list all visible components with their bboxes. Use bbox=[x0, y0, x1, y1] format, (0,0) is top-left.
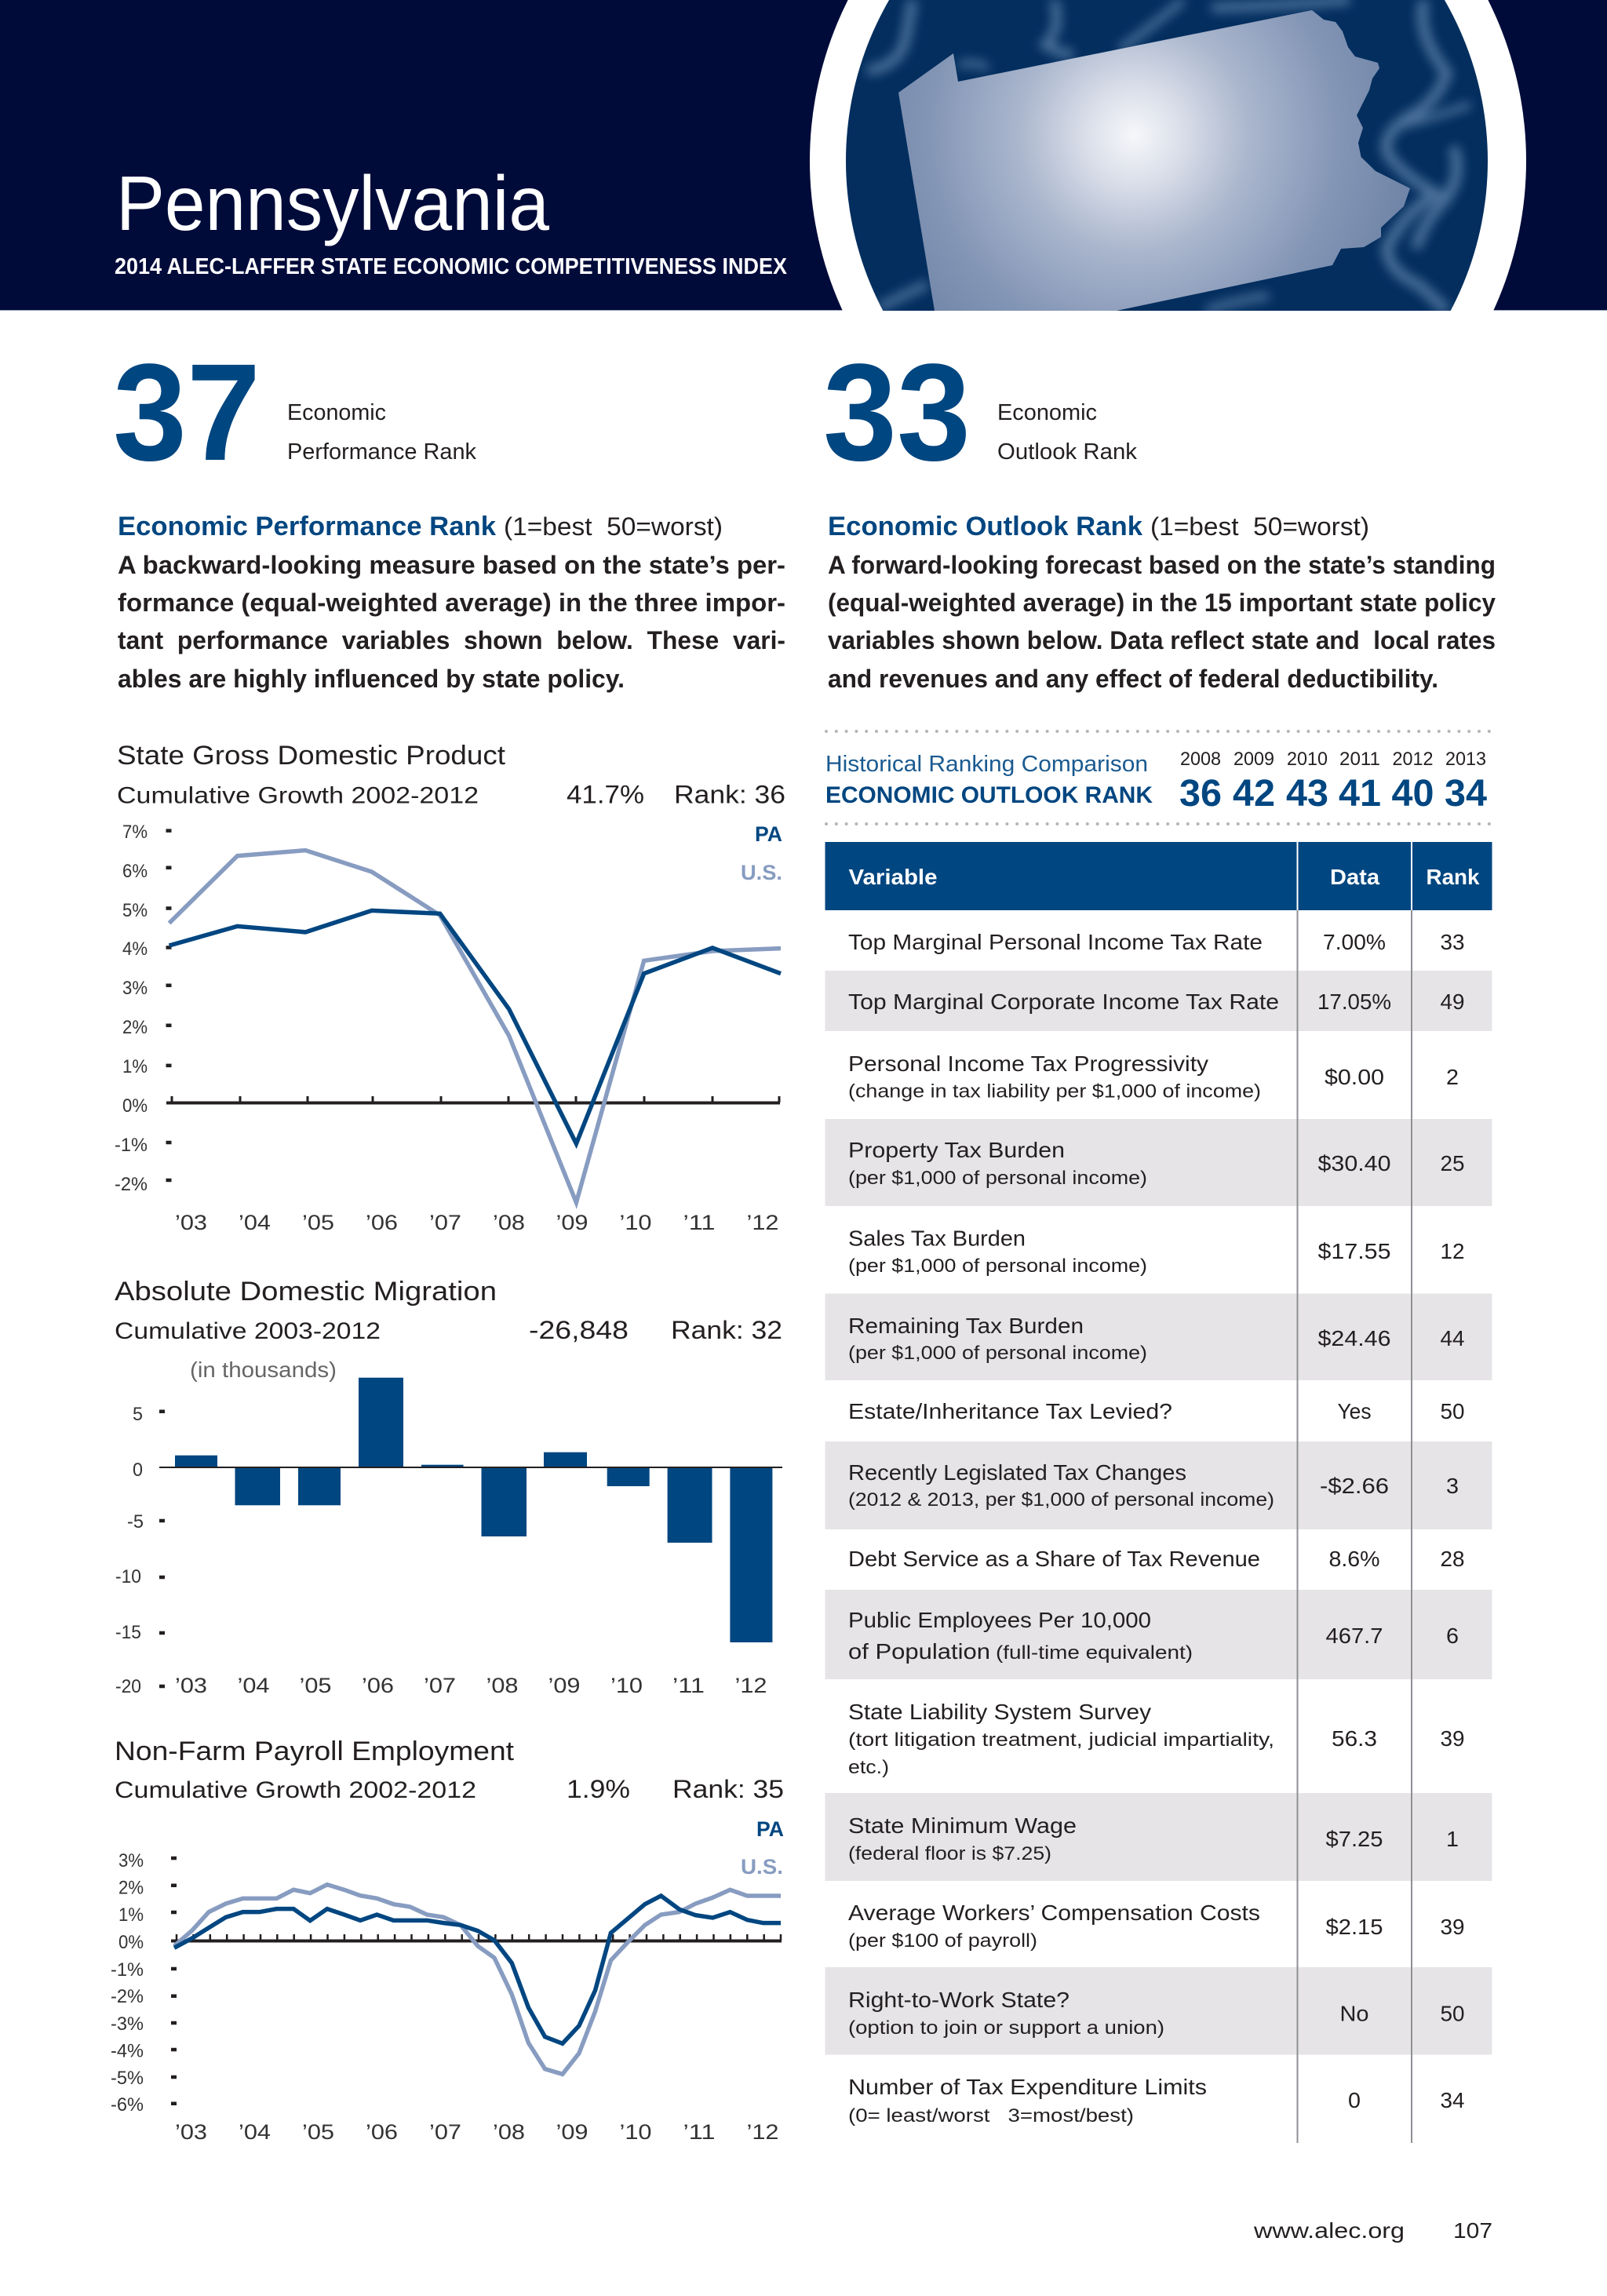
legend: PA bbox=[756, 1817, 784, 1841]
x axis labels: ’09 bbox=[556, 1211, 589, 1234]
panel: historical ranking comparison bbox=[825, 749, 1487, 815]
row: personal income tax progressivity: (change in tax liability per $1,000 of income) bbox=[848, 1081, 1261, 1102]
x axis labels: ’03 bbox=[175, 1211, 207, 1234]
row: remaining tax burden: 44 bbox=[1441, 1326, 1464, 1350]
row: remaining tax burden: Remaining Tax Burden bbox=[848, 1314, 1084, 1338]
chart heading: GDP: 41.7% bbox=[567, 780, 644, 808]
chart heading: employment: Rank: 35 bbox=[672, 1775, 784, 1803]
row: sales tax burden: $17.55 bbox=[1318, 1239, 1390, 1263]
y axis labels: -15 bbox=[115, 1622, 141, 1643]
row: top marginal corporate income tax rate: Top Marginal Corporate Income Tax Rate bbox=[848, 989, 1279, 1014]
line: PA bbox=[169, 910, 781, 1144]
panel: historical ranking comparison: ECONOMIC OUTLOOK RANK bbox=[825, 782, 1153, 808]
row: state minimum wage: State Minimum Wage bbox=[848, 1813, 1077, 1838]
header banner bbox=[0, 0, 1607, 311]
y axis labels: 5% bbox=[122, 900, 148, 921]
row: right-to-work state bbox=[848, 1988, 1464, 2039]
x axis labels bbox=[175, 2120, 778, 2144]
x axis labels: ’04 bbox=[237, 1674, 270, 1697]
y axis labels bbox=[115, 822, 148, 1195]
table header bbox=[825, 842, 1492, 910]
row: public employees: (full-time equivalent) bbox=[996, 1642, 1193, 1664]
text block: economic performance rank description: A backward-looking measure based on the state’s per- bbox=[118, 551, 785, 579]
outlook rank number: Outlook Rank bbox=[997, 439, 1138, 465]
years: 2008 bbox=[1180, 749, 1221, 770]
footer: www.alec.org bbox=[1253, 2218, 1405, 2243]
y axis labels: 0 bbox=[133, 1460, 143, 1481]
outlook rank number bbox=[823, 336, 1138, 490]
row: personal income tax progressivity: $0.00 bbox=[1325, 1065, 1384, 1089]
row: number of tax expenditure limits: (0= least/worst 3=most/best) bbox=[848, 2105, 1134, 2127]
chart heading: migration: -26,848 bbox=[529, 1316, 629, 1344]
row: public employees: of Population bbox=[848, 1639, 990, 1664]
x axis labels bbox=[175, 1211, 778, 1234]
text block: economic performance rank description: (1=best 50=worst) bbox=[504, 512, 723, 541]
x axis labels: ’10 bbox=[620, 2120, 651, 2144]
row: recently legislated tax changes: (2012 & 2013, per $1,000 of personal income) bbox=[848, 1489, 1274, 1511]
y axis labels: 4% bbox=[122, 938, 148, 960]
x axis labels: ’06 bbox=[366, 2120, 398, 2144]
row: right-to-work state: No bbox=[1340, 2001, 1368, 2026]
x axis labels: ’08 bbox=[493, 1211, 525, 1234]
performance rank number: Economic bbox=[287, 400, 386, 425]
outlook rank number: 33 bbox=[823, 336, 971, 490]
row: sales tax burden: (per $1,000 of personal income) bbox=[848, 1256, 1147, 1277]
row: state liability system survey: 56.3 bbox=[1332, 1726, 1377, 1751]
row: right-to-work state: 50 bbox=[1441, 2001, 1464, 2026]
row: property tax burden: (per $1,000 of personal income) bbox=[848, 1168, 1147, 1189]
y axis labels: -4% bbox=[111, 2041, 144, 2062]
chart: non-farm payroll employment bbox=[111, 1737, 784, 2144]
x axis labels: ’06 bbox=[362, 1674, 394, 1697]
row: property tax burden: Property Tax Burden bbox=[848, 1138, 1065, 1162]
x axis labels: ’05 bbox=[300, 1674, 331, 1697]
years bbox=[1180, 749, 1486, 770]
row: number of tax expenditure limits: 0 bbox=[1348, 2088, 1361, 2112]
row: property tax burden bbox=[848, 1138, 1464, 1189]
text block: economic outlook rank description bbox=[828, 512, 1496, 693]
ranks by year bbox=[1179, 773, 1487, 815]
table header: Data bbox=[1330, 865, 1379, 889]
text block: economic performance rank description: ables are highly influenced by state policy. bbox=[118, 665, 625, 693]
y axis labels: -1% bbox=[115, 1135, 148, 1156]
chart: absolute domestic migration bbox=[115, 1277, 782, 1697]
row: property tax burden: $30.40 bbox=[1318, 1151, 1390, 1175]
y axis labels: 1% bbox=[118, 1904, 144, 1926]
row: state liability system survey: 39 bbox=[1441, 1726, 1464, 1751]
x axis labels: ’07 bbox=[424, 1674, 456, 1697]
row: personal income tax progressivity bbox=[848, 1051, 1459, 1102]
x axis labels: ’08 bbox=[493, 2120, 525, 2144]
legend: PA bbox=[755, 822, 782, 846]
subtitle: 2014 ALEC-LAFFER STATE ECONOMIC COMPETITIVENESS INDEX bbox=[115, 254, 788, 279]
years: 2012 bbox=[1392, 749, 1433, 770]
row: state liability system survey bbox=[848, 1700, 1464, 1778]
legend bbox=[741, 1817, 784, 1879]
legend: U.S. bbox=[741, 1855, 783, 1879]
performance rank number: Performance Rank bbox=[287, 439, 476, 465]
row: state liability system survey: (tort litigation treatment, judicial impartiality, bbox=[848, 1729, 1274, 1751]
row: sales tax burden: 12 bbox=[1441, 1239, 1464, 1263]
row: sales tax burden bbox=[848, 1226, 1464, 1277]
chart heading: migration: (in thousands) bbox=[190, 1358, 337, 1382]
y axis labels: -3% bbox=[111, 2014, 144, 2035]
footer bbox=[1253, 2218, 1492, 2243]
row: number of tax expenditure limits bbox=[848, 2075, 1464, 2127]
x axis labels: ’08 bbox=[486, 1674, 518, 1697]
x axis labels: ’10 bbox=[620, 1211, 651, 1234]
row: debt service: Debt Service as a Share of Tax Revenue bbox=[848, 1547, 1260, 1571]
row: remaining tax burden: (per $1,000 of personal income) bbox=[848, 1343, 1147, 1364]
y axis labels: -10 bbox=[115, 1566, 141, 1587]
y axis labels: 2% bbox=[122, 1017, 148, 1038]
row: top marginal corporate income tax rate: 49 bbox=[1441, 989, 1464, 1014]
text block: economic performance rank description: formance (equal-weighted average) in the three impor- bbox=[118, 589, 785, 617]
row: top marginal corporate income tax rate: 17.05% bbox=[1317, 989, 1391, 1014]
text block: economic outlook rank description: A forward-looking forecast based on the state’s standing bbox=[828, 551, 1496, 579]
y axis labels: 0% bbox=[122, 1095, 148, 1117]
chart heading: employment: 1.9% bbox=[567, 1775, 630, 1803]
x axis labels: ’07 bbox=[429, 1211, 461, 1234]
y axis labels: -1% bbox=[111, 1959, 144, 1981]
row: number of tax expenditure limits: 34 bbox=[1441, 2088, 1464, 2112]
y axis labels: -5% bbox=[111, 2068, 144, 2089]
x axis labels: ’04 bbox=[239, 2120, 271, 2144]
row: top marginal personal income tax rate bbox=[848, 930, 1464, 954]
row: debt service: 8.6% bbox=[1329, 1547, 1379, 1571]
years: 2011 bbox=[1339, 749, 1380, 770]
ranks by year: 36 bbox=[1179, 773, 1222, 815]
row: debt service bbox=[848, 1547, 1464, 1571]
x axis labels: ’10 bbox=[610, 1674, 643, 1697]
x axis labels: ’09 bbox=[548, 1674, 581, 1697]
y axis labels: 3% bbox=[122, 978, 148, 999]
years: 2009 bbox=[1233, 749, 1274, 770]
y axis labels: -6% bbox=[111, 2094, 144, 2116]
text block: economic outlook rank description: (1=best 50=worst) bbox=[1150, 512, 1369, 541]
performance rank number: 37 bbox=[113, 336, 261, 490]
line: U.S. bbox=[169, 851, 781, 1202]
row: top marginal corporate income tax rate bbox=[848, 989, 1464, 1014]
x axis labels: ’03 bbox=[175, 2120, 207, 2144]
legend: U.S. bbox=[741, 861, 782, 884]
row: remaining tax burden: $24.46 bbox=[1318, 1326, 1390, 1350]
row: public employees: 467.7 bbox=[1326, 1624, 1383, 1648]
chart heading: migration: Rank: 32 bbox=[671, 1316, 782, 1344]
x axis labels: ’06 bbox=[366, 1211, 398, 1234]
row: average workers' compensation costs: Average Workers’ Compensation Costs bbox=[848, 1901, 1260, 1925]
row: state minimum wage bbox=[848, 1813, 1459, 1864]
table: state policy variables bbox=[825, 842, 1492, 2143]
x axis labels: ’11 bbox=[672, 1674, 705, 1697]
row: sales tax burden: Sales Tax Burden bbox=[848, 1226, 1026, 1251]
ranks by year: 41 bbox=[1339, 773, 1381, 815]
y axis labels bbox=[115, 1404, 144, 1697]
x axis labels: ’05 bbox=[302, 2120, 334, 2144]
x axis labels: ’11 bbox=[683, 1211, 716, 1234]
y axis labels: -2% bbox=[111, 1986, 144, 2007]
row: recently legislated tax changes bbox=[848, 1460, 1459, 1511]
chart heading: employment: Cumulative Growth 2002-2012 bbox=[115, 1777, 476, 1803]
row: state minimum wage: 1 bbox=[1446, 1827, 1459, 1851]
x axis labels: ’12 bbox=[747, 1211, 778, 1234]
table header: Rank bbox=[1427, 865, 1480, 889]
x axis labels: ’05 bbox=[302, 1211, 334, 1234]
row: right-to-work state: (option to join or support a union) bbox=[848, 2017, 1164, 2039]
row: property tax burden: 25 bbox=[1441, 1151, 1464, 1175]
x axis labels: ’12 bbox=[734, 1674, 767, 1697]
row: debt service: 28 bbox=[1441, 1547, 1464, 1571]
row: number of tax expenditure limits: Number of Tax Expenditure Limits bbox=[848, 2075, 1207, 2099]
row: remaining tax burden bbox=[848, 1314, 1464, 1364]
row: top marginal personal income tax rate: 7.00% bbox=[1323, 930, 1386, 954]
medallion: Pennsylvania state map bbox=[810, 0, 1526, 311]
y axis labels: 1% bbox=[122, 1056, 148, 1077]
row: state liability system survey: State Liability System Survey bbox=[848, 1700, 1151, 1724]
row: state minimum wage: $7.25 bbox=[1326, 1827, 1383, 1851]
row: top marginal personal income tax rate: Top Marginal Personal Income Tax Rate bbox=[848, 930, 1263, 954]
ranks by year: 43 bbox=[1286, 773, 1328, 815]
text block: economic outlook rank description: (equal-weighted average) in the 15 important state policy bbox=[828, 589, 1496, 617]
years: 2013 bbox=[1445, 749, 1486, 770]
chart heading: GDP: Rank: 36 bbox=[674, 780, 785, 808]
row: state liability system survey: etc.) bbox=[848, 1757, 889, 1778]
text block: economic outlook rank description: and revenues and any effect of federal deductibility. bbox=[828, 665, 1438, 693]
ranks by year: 34 bbox=[1445, 773, 1487, 815]
y axis labels: 7% bbox=[122, 822, 148, 843]
x axis labels: ’07 bbox=[429, 2120, 461, 2144]
text block: economic outlook rank description: variables shown below. Data reflect state and local rates bbox=[828, 626, 1496, 654]
y axis labels: 5 bbox=[133, 1404, 143, 1425]
row: estate/inheritance tax levied bbox=[848, 1399, 1464, 1423]
row: state minimum wage: (federal floor is $7.25) bbox=[848, 1843, 1051, 1864]
row: estate/inheritance tax levied: 50 bbox=[1441, 1399, 1464, 1423]
years: 2010 bbox=[1287, 749, 1328, 770]
x axis labels bbox=[175, 1674, 767, 1697]
row: estate/inheritance tax levied: Estate/Inheritance Tax Levied? bbox=[848, 1399, 1172, 1423]
chart heading: migration: Absolute Domestic Migration bbox=[115, 1277, 497, 1307]
chart heading: migration: Cumulative 2003-2012 bbox=[115, 1318, 381, 1344]
x axis labels: ’04 bbox=[239, 1211, 271, 1234]
panel: historical ranking comparison: Historical Ranking Comparison bbox=[825, 752, 1148, 777]
ranks by year: 42 bbox=[1233, 773, 1275, 815]
chart heading: GDP: Cumulative Growth 2002-2012 bbox=[117, 783, 479, 808]
y axis labels: 3% bbox=[118, 1850, 144, 1871]
text block: economic performance rank description: Economic Performance Rank bbox=[118, 512, 496, 541]
line: U.S. bbox=[174, 1885, 781, 2074]
x axis labels: ’11 bbox=[683, 2120, 716, 2144]
row: estate/inheritance tax levied: Yes bbox=[1337, 1399, 1372, 1423]
row: personal income tax progressivity: Personal Income Tax Progressivity bbox=[848, 1051, 1208, 1076]
row: recently legislated tax changes: 3 bbox=[1446, 1474, 1459, 1498]
row: average workers' compensation costs: (per $100 of payroll) bbox=[848, 1930, 1037, 1952]
y axis labels: 0% bbox=[118, 1932, 144, 1953]
row: personal income tax progressivity: 2 bbox=[1446, 1065, 1459, 1089]
footer: 107 bbox=[1453, 2218, 1492, 2243]
y axis labels bbox=[111, 1850, 144, 2116]
chart heading: migration bbox=[115, 1277, 782, 1382]
text block: economic outlook rank description: Economic Outlook Rank bbox=[828, 512, 1142, 541]
performance rank number bbox=[113, 336, 476, 490]
row: recently legislated tax changes: Recently Legislated Tax Changes bbox=[848, 1460, 1186, 1485]
chart heading: employment: Non-Farm Payroll Employment bbox=[115, 1737, 515, 1766]
text block: economic performance rank description bbox=[118, 512, 785, 693]
y axis labels: -5 bbox=[127, 1511, 144, 1532]
y axis labels: 2% bbox=[118, 1878, 144, 1899]
outlook rank number: Economic bbox=[997, 400, 1097, 425]
y axis labels: -20 bbox=[115, 1676, 141, 1697]
bars bbox=[175, 1378, 772, 1642]
row: top marginal personal income tax rate: 33 bbox=[1441, 930, 1464, 954]
chart heading: GDP bbox=[117, 741, 785, 808]
x axis labels: ’09 bbox=[556, 2120, 589, 2144]
x axis labels: ’03 bbox=[175, 1674, 207, 1697]
y axis labels: -2% bbox=[115, 1174, 148, 1195]
x axis labels: ’12 bbox=[747, 2120, 778, 2144]
row: average workers' compensation costs bbox=[848, 1901, 1464, 1952]
row: public employees: 6 bbox=[1446, 1624, 1459, 1648]
text block: economic performance rank description: tant performance variables shown below. These vari- bbox=[118, 626, 785, 654]
row: right-to-work state: Right-to-Work State? bbox=[848, 1988, 1070, 2012]
row: public employees: Public Employees Per 10,000 bbox=[848, 1608, 1151, 1632]
line: PA bbox=[174, 1896, 781, 2043]
row: average workers' compensation costs: $2.15 bbox=[1326, 1915, 1383, 1939]
title: Pennsylvania bbox=[116, 160, 549, 246]
row: average workers' compensation costs: 39 bbox=[1441, 1915, 1464, 1939]
chart heading: employment bbox=[115, 1737, 784, 1803]
ranks by year: 40 bbox=[1392, 773, 1434, 815]
y axis labels: 6% bbox=[122, 861, 148, 882]
chart heading: GDP: State Gross Domestic Product bbox=[117, 741, 506, 771]
row: public employees bbox=[848, 1608, 1459, 1664]
row: recently legislated tax changes: -$2.66 bbox=[1320, 1474, 1389, 1498]
table header: Variable bbox=[849, 865, 937, 889]
legend bbox=[741, 822, 782, 884]
chart: state gross domestic product bbox=[115, 741, 785, 1234]
